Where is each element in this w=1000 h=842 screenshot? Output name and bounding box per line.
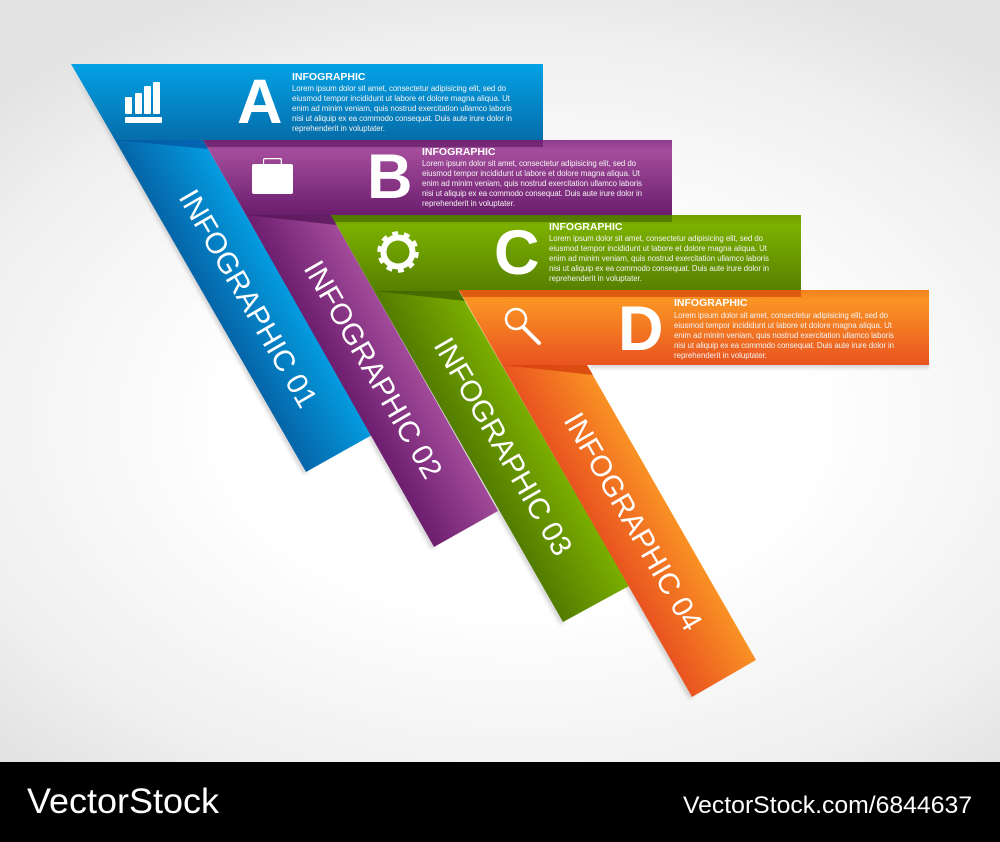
icon: gear	[380, 234, 416, 270]
text block D: INFOGRAPHIC	[674, 297, 748, 309]
ribbon shadows	[69, 66, 929, 699]
panel A	[71, 64, 543, 140]
letter B: B	[367, 142, 412, 212]
vertical ribbon 02	[246, 215, 498, 547]
text block D: Lorem ipsum dolor sit amet, consectetur adipisicing elit, sed do	[674, 311, 889, 320]
letter C: C	[494, 218, 540, 288]
text block B: INFOGRAPHIC	[422, 146, 496, 158]
panel B	[203, 140, 672, 215]
footer bar	[0, 762, 1000, 842]
text block D: eiusmod tempor incididunt ut labore et dolore magna aliqua. Ut	[674, 321, 893, 330]
text block C: eiusmod tempor incididunt ut labore et dolore magna aliqua. Ut	[549, 244, 768, 253]
text block C: reprehenderit in voluptater.	[549, 274, 642, 283]
text block D: enim ad minim veniam, quis nostrud exercitation ullamco laboris	[674, 331, 894, 340]
vertical ribbon 03	[374, 291, 629, 622]
text block A: eiusmod tempor incididunt ut labore et dolore magna aliqua. Ut	[292, 94, 511, 103]
text block D: nisi ut aliquip ex ea commodo consequat. Duis aute irure dolor in	[674, 341, 894, 350]
text block B: eiusmod tempor incididunt ut labore et dolore magna aliqua. Ut	[422, 169, 641, 178]
image id: VectorStock.com/6844637	[683, 792, 972, 819]
label: INFOGRAPHIC 03: INFOGRAPHIC 03	[427, 332, 578, 561]
text block B: enim ad minim veniam, quis nostrud exercitation ullamco laboris	[422, 179, 642, 188]
text block C: INFOGRAPHIC	[549, 221, 623, 233]
text block B: Lorem ipsum dolor sit amet, consectetur adipisicing elit, sed do	[422, 159, 637, 168]
icon: magnifier	[506, 309, 539, 343]
vertical ribbon 01	[115, 140, 372, 472]
icon: briefcase	[252, 158, 293, 194]
vertical ribbon 04	[502, 365, 756, 697]
panel C	[331, 215, 801, 291]
panel D	[459, 290, 929, 365]
text block A: Lorem ipsum dolor sit amet, consectetur adipisicing elit, sed do	[292, 84, 507, 93]
text block A: nisi ut aliquip ex ea commodo consequat. Duis aute irure dolor in	[292, 114, 512, 123]
VectorStock logo: VectorStock	[27, 782, 220, 821]
text block D: reprehenderit in voluptater.	[674, 351, 767, 360]
text block C	[549, 221, 769, 283]
text block A	[292, 71, 512, 133]
letter D: D	[618, 294, 664, 364]
text block B: reprehenderit in voluptater.	[422, 199, 515, 208]
text block D	[674, 297, 894, 360]
label: INFOGRAPHIC 04: INFOGRAPHIC 04	[557, 407, 708, 636]
text block A: reprehenderit in voluptater.	[292, 124, 385, 133]
text block B: nisi ut aliquip ex ea commodo consequat. Duis aute irure dolor in	[422, 189, 642, 198]
label: INFOGRAPHIC 02: INFOGRAPHIC 02	[297, 255, 448, 484]
label: INFOGRAPHIC 01: INFOGRAPHIC 01	[172, 184, 323, 413]
text block C: enim ad minim veniam, quis nostrud exercitation ullamco laboris	[549, 254, 769, 263]
icon: bar chart	[125, 82, 162, 123]
text block C: nisi ut aliquip ex ea commodo consequat. Duis aute irure dolor in	[549, 264, 769, 273]
text block C: Lorem ipsum dolor sit amet, consectetur adipisicing elit, sed do	[549, 234, 764, 243]
text block A: INFOGRAPHIC	[292, 71, 366, 83]
text block B	[422, 146, 642, 208]
letter A: A	[237, 67, 282, 137]
text block A: enim ad minim veniam, quis nostrud exercitation ullamco laboris	[292, 104, 512, 113]
